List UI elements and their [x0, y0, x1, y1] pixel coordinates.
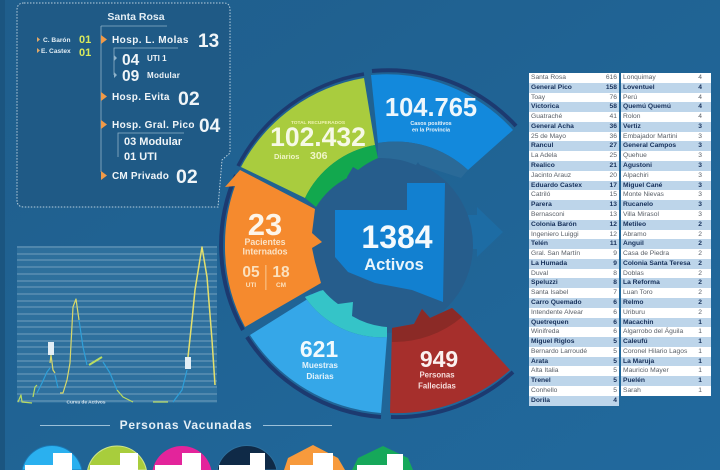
table: casos por localidad, column 2: 3 — [698, 142, 702, 149]
table: casos por localidad, column 2: 1 — [698, 387, 702, 394]
other localities: C. Barón — [43, 37, 70, 44]
table: casos por localidad, column 1: Victorica — [531, 103, 559, 110]
Hosp. L. Molas: Modular — [147, 71, 180, 80]
chart caption: Curva de Activos — [66, 400, 106, 406]
table: casos por localidad, column 2: 3 — [698, 211, 702, 218]
center map: activos — [335, 183, 445, 302]
icon: map on orange — [284, 445, 345, 470]
table: casos por localidad, column 1: 76 — [610, 94, 617, 101]
Hosp. Evita — [101, 88, 200, 110]
other localities: E. Castex — [41, 48, 71, 55]
label: total recuperados: TOTAL RECUPERADOS — [291, 120, 346, 126]
panel: hospital occupation — [17, 3, 230, 207]
table: casos por localidad, column 1: 36 — [610, 133, 617, 140]
table: casos por localidad, column 2: General Campos — [623, 142, 676, 149]
value: fallecidos: 949 — [420, 346, 458, 372]
table: casos por localidad, column 1: 8 — [613, 279, 617, 286]
table: casos por localidad, column 1: Gral. San Martín — [531, 250, 580, 257]
breakdown UTI and CM: 18 — [272, 264, 290, 281]
table: casos por localidad, column 2: Rolon — [623, 113, 640, 120]
table: casos por localidad, column 2: Embajador Martini — [623, 133, 677, 140]
table: casos por localidad, column 2: 2 — [698, 221, 702, 228]
icon: map on light blue — [22, 446, 82, 470]
value: recuperados: 102.432 — [270, 122, 366, 152]
table: casos por localidad, column 1: 15 — [610, 191, 617, 198]
table: casos por localidad, column 2: Colonia Santa Teresa — [623, 260, 691, 267]
table: casos por localidad, column 1: 11 — [610, 240, 617, 247]
chart data labels — [48, 342, 191, 369]
table: casos por localidad, column 1: Carro Quemado — [531, 299, 582, 306]
table: casos por localidad, column 2: Anguil — [623, 240, 644, 247]
table: casos por localidad, column 1: 13 — [610, 201, 617, 208]
other localities: 01 — [79, 47, 91, 59]
Hosp. L. Molas: 09 — [122, 68, 140, 85]
caption: fallecidos: Personas — [419, 370, 455, 380]
table: casos por localidad, column 2: Caleufú — [623, 338, 648, 345]
table: casos por localidad, column 1: 5 — [613, 367, 617, 374]
segment: muestras diarias — [247, 290, 387, 417]
table: casos por localidad, column 1: 36 — [610, 123, 617, 130]
table: casos por localidad, column 2: Perú — [623, 94, 637, 101]
table: casos por localidad, column 2: Macachin — [623, 319, 653, 326]
table: casos por localidad, column 2: Luan Toro — [623, 289, 653, 296]
breakdown UTI and CM: CM — [276, 282, 286, 289]
table: casos por localidad, column 2: 4 — [698, 113, 702, 120]
caption: muestras: Muestras — [302, 361, 338, 370]
breakdown UTI and CM: UTI — [246, 282, 256, 289]
table: casos por localidad, column 2: Puelén — [623, 377, 645, 384]
icon: map on lime — [88, 446, 146, 470]
table: casos por localidad, column 1: 6 — [613, 328, 617, 335]
table: casos por localidad, column 2: Loventuel — [623, 84, 655, 91]
panel heading: Santa Rosa: Santa Rosa — [107, 11, 165, 23]
table: casos por localidad, column 1: 4 — [613, 397, 617, 404]
table: casos por localidad, column 1: Guatraché — [531, 113, 562, 120]
table: casos por localidad, column 2: Quemú Quemú — [623, 103, 671, 110]
Hosp. Gral. Pico: 01 UTI — [124, 151, 157, 163]
table: casos por localidad, column 2: 4 — [698, 74, 702, 81]
table: casos por localidad, column 2 — [621, 73, 711, 396]
table: casos por localidad, column 2: 3 — [698, 123, 702, 130]
table: casos por localidad, column 1: Arata — [531, 358, 548, 365]
vaccination icons — [22, 445, 413, 470]
CM Privado — [101, 166, 198, 188]
table: casos por localidad, column 1: 8 — [613, 270, 617, 277]
table: casos por localidad, column 1: Jacinto Arauz — [531, 172, 571, 179]
table: casos por localidad, column 1: Santa Rosa — [531, 74, 566, 81]
table: casos por localidad, column 1: 13 — [610, 211, 617, 218]
table: casos por localidad, column 2: Villa Mirasol — [623, 211, 659, 218]
table: casos por localidad, column 2: Sarah — [623, 387, 641, 394]
caption: casos positivos: Casos positivos — [410, 121, 452, 127]
table: casos por localidad, column 2: 4 — [698, 94, 702, 101]
table: casos por localidad, column 1: Rancul — [531, 142, 553, 149]
segment: pacientes internados — [221, 170, 322, 330]
Hosp. Gral. Pico: 04 — [199, 116, 221, 137]
table: casos por localidad, column 1: Colonia Barón — [531, 221, 577, 228]
table: casos por localidad, column 1: Parera — [531, 201, 552, 208]
table: casos por localidad, column 2: 1 — [698, 319, 702, 326]
table: casos por localidad, column 2: 2 — [698, 309, 702, 316]
table: casos por localidad, column 2: 1 — [698, 358, 702, 365]
icon: map on navy — [217, 446, 277, 470]
table: casos por localidad, column 2: 2 — [698, 240, 702, 247]
CM Privado: CM Privado — [112, 171, 169, 182]
table: casos por localidad, column 2: Miguel Cané — [623, 182, 662, 189]
table: casos por localidad, column 2: 3 — [698, 182, 702, 189]
table: casos por localidad, column 1: 5 — [613, 358, 617, 365]
table: casos por localidad, column 2: Alpachiri — [623, 172, 649, 179]
Hosp. Gral. Pico: 03 Modular — [124, 136, 183, 148]
table: casos por localidad, column 2: 2 — [698, 230, 702, 238]
table: casos por localidad, column 2: Casa de Piedra — [623, 250, 669, 257]
table: casos por localidad, column 1: 5 — [613, 387, 617, 394]
table: casos por localidad, column 1: 6 — [613, 299, 617, 306]
table: casos por localidad, column 1: Telén — [531, 240, 548, 247]
table: casos por localidad, column 2: 1 — [698, 348, 702, 355]
table: casos por localidad, column 1 — [529, 73, 619, 406]
table: casos por localidad, column 1: Conhello — [531, 387, 557, 394]
table: casos por localidad, column 1: Quetrequen — [531, 319, 569, 326]
heading: personas vacunadas: Personas Vacunadas — [120, 418, 252, 432]
table: casos por localidad, column 1: 6 — [613, 309, 617, 316]
table: casos por localidad, column 2: Metileo — [623, 221, 646, 228]
table: casos por localidad, column 1: 5 — [613, 348, 617, 355]
table: casos por localidad, column 1: 12 — [610, 221, 617, 228]
table: casos por localidad, column 1: 616 — [606, 74, 617, 81]
table: casos por localidad, column 2: Monte Nievas — [623, 191, 664, 198]
table: casos por localidad, column 1: Santa Isabel — [531, 289, 568, 296]
table: casos por localidad, column 2: 3 — [698, 162, 702, 169]
table: casos por localidad, column 2: Relmo — [623, 299, 643, 306]
table: casos por localidad, column 1: Winifreda — [531, 328, 559, 335]
table: casos por localidad, column 2: Coronel Hilario Lagos — [623, 348, 687, 355]
other localities: 01 — [79, 34, 91, 46]
table: casos por localidad, column 2: Lonquimay — [623, 74, 656, 81]
caption: casos positivos: en la Provincia — [412, 128, 451, 134]
table: casos por localidad, column 1: 58 — [610, 103, 617, 110]
table: casos por localidad, column 1: La Humada — [531, 260, 567, 267]
table: casos por localidad, column 1: La Adela — [531, 152, 557, 159]
Hosp. Evita: Hosp. Evita — [112, 92, 170, 103]
table: casos por localidad, column 2: Vertiz — [623, 123, 641, 130]
table: casos por localidad, column 1: 9 — [613, 260, 617, 267]
table: casos por localidad, column 1: 5 — [613, 377, 617, 384]
table: casos por localidad, column 2: Algarrobo del Águila — [623, 328, 683, 335]
table: casos por localidad, column 1: 158 — [606, 84, 617, 91]
table: casos por localidad, column 2: La Maruja — [623, 358, 654, 365]
table: casos por localidad, column 1: 12 — [610, 230, 617, 238]
table: casos por localidad, column 1: 9 — [613, 250, 617, 257]
faint arrow behind map — [458, 207, 503, 257]
table: casos por localidad, column 2: 4 — [698, 84, 702, 91]
table: casos por localidad, column 1: Toay — [531, 94, 545, 101]
table: casos por localidad, column 1: 7 — [613, 289, 617, 296]
value: casos positivos: 104.765 — [385, 94, 477, 122]
table: casos por localidad, column 1: Ingeniero Luiggi — [531, 230, 579, 238]
table: casos por localidad, column 1: 20 — [610, 172, 617, 179]
breakdown UTI and CM — [242, 264, 290, 290]
caption: muestras: Diarias — [306, 372, 334, 381]
table: casos por localidad, column 1: Speluzzi — [531, 279, 558, 286]
other localities — [37, 34, 91, 59]
table: casos por localidad, column 1: General Acha — [531, 123, 574, 130]
table: casos por localidad, column 1: 6 — [613, 319, 617, 326]
table: casos por localidad, column 1: 5 — [613, 338, 617, 345]
table: casos por localidad, column 2: 1 — [698, 377, 702, 384]
tree lines — [101, 26, 184, 172]
icon: map on green — [352, 446, 413, 470]
table: casos por localidad, column 1: 21 — [610, 162, 617, 169]
Hosp. L. Molas: Hosp. L. Molas — [112, 35, 189, 46]
table: casos por localidad, column 2: 1 — [698, 328, 702, 335]
table: casos por localidad, column 2: 2 — [698, 260, 702, 267]
table: casos por localidad, column 2: 2 — [698, 250, 702, 257]
Hosp. Gral. Pico — [101, 116, 221, 163]
segment: personas fallecidas — [390, 308, 513, 417]
table: casos por localidad, column 2: Rucanelo — [623, 201, 653, 208]
table: casos por localidad, column 2: 1 — [698, 338, 702, 345]
table: casos por localidad, column 2: 2 — [698, 270, 702, 277]
breakdown UTI and CM: 05 — [242, 264, 260, 281]
table: casos por localidad, column 2: Quehue — [623, 152, 647, 159]
table: casos por localidad, column 2: Doblas — [623, 270, 644, 277]
table: casos por localidad, column 1: Bernasconi — [531, 211, 564, 218]
table: casos por localidad, column 2: 3 — [698, 172, 702, 179]
caption: activos: Activos — [364, 256, 424, 274]
value: muestras: 621 — [300, 336, 338, 362]
icon: map on magenta — [153, 446, 211, 470]
Hosp. L. Molas — [101, 31, 219, 85]
table: casos por localidad, column 2: La Reforma — [623, 279, 660, 286]
Hosp. L. Molas: 13 — [198, 31, 219, 52]
Hosp. L. Molas: UTI 1 — [147, 54, 167, 63]
table: casos por localidad, column 1: Bernardo Larroudé — [531, 348, 587, 355]
table: casos por localidad, column 1: Realico — [531, 162, 555, 169]
table: casos por localidad, column 1: Catriló — [531, 191, 550, 198]
table: casos por localidad, column 2: Uriburu — [623, 309, 645, 316]
table: casos por localidad, column 1: Miguel Riglos — [531, 338, 574, 345]
table: casos por localidad, column 1: 41 — [610, 113, 617, 120]
table: casos por localidad, column 1: Trenel — [531, 377, 551, 384]
table: casos por localidad, column 2: 2 — [698, 279, 702, 286]
table: casos por localidad, column 2: 3 — [698, 133, 702, 140]
table: casos por localidad, column 1: 25 de Mayo — [531, 133, 566, 140]
table: casos por localidad, column 2: Agustoni — [623, 162, 652, 169]
Hosp. L. Molas: 04 — [122, 52, 140, 69]
CM Privado: 02 — [176, 166, 198, 188]
table: casos por localidad, column 2: 2 — [698, 289, 702, 296]
table: casos por localidad, column 2: Mauricio Mayer — [623, 367, 669, 374]
caption: fallecidos: Fallecidas — [418, 382, 457, 390]
caption: internados: Internados — [243, 246, 288, 256]
table: casos por localidad, column 2: 1 — [698, 367, 702, 374]
value: activos: 1384 — [361, 219, 433, 255]
table: casos por localidad, column 2: 3 — [698, 152, 702, 159]
table: casos por localidad, column 2: 3 — [698, 191, 702, 198]
table: casos por localidad, column 1: Eduardo Castex — [531, 182, 582, 189]
table: casos por localidad, column 1: 17 — [610, 182, 617, 189]
Hosp. Gral. Pico: Hosp. Gral. Pico — [112, 120, 195, 131]
table: casos por localidad, column 1: Alta Italia — [531, 367, 559, 374]
table: casos por localidad, column 2: 2 — [698, 299, 702, 306]
Hosp. Evita: 02 — [178, 88, 200, 110]
table: casos por localidad, column 1: General Pico — [531, 84, 572, 91]
daily recovered: 306 — [310, 150, 328, 162]
value: internados: 23 — [248, 207, 282, 242]
center disc — [297, 157, 473, 333]
segment: recuperados — [238, 74, 378, 207]
daily recovered: Diarios — [274, 152, 299, 161]
table: casos por localidad, column 1: Intendente Alvear — [531, 309, 583, 316]
table: casos por localidad, column 2: 4 — [698, 103, 702, 110]
table: casos por localidad, column 1: Dorila — [531, 397, 550, 404]
caption: internados: Pacientes — [244, 237, 286, 247]
table: casos por localidad, column 1: Duval — [531, 270, 548, 277]
line chart: Curva de Activos — [17, 246, 217, 406]
table: casos por localidad, column 1: 25 — [610, 152, 617, 159]
table: casos por localidad, column 2: 3 — [698, 201, 702, 208]
segment: casos positivos — [371, 70, 516, 178]
table: casos por localidad, column 1: 27 — [610, 142, 617, 149]
table: casos por localidad, column 2: Abramo — [623, 230, 646, 238]
